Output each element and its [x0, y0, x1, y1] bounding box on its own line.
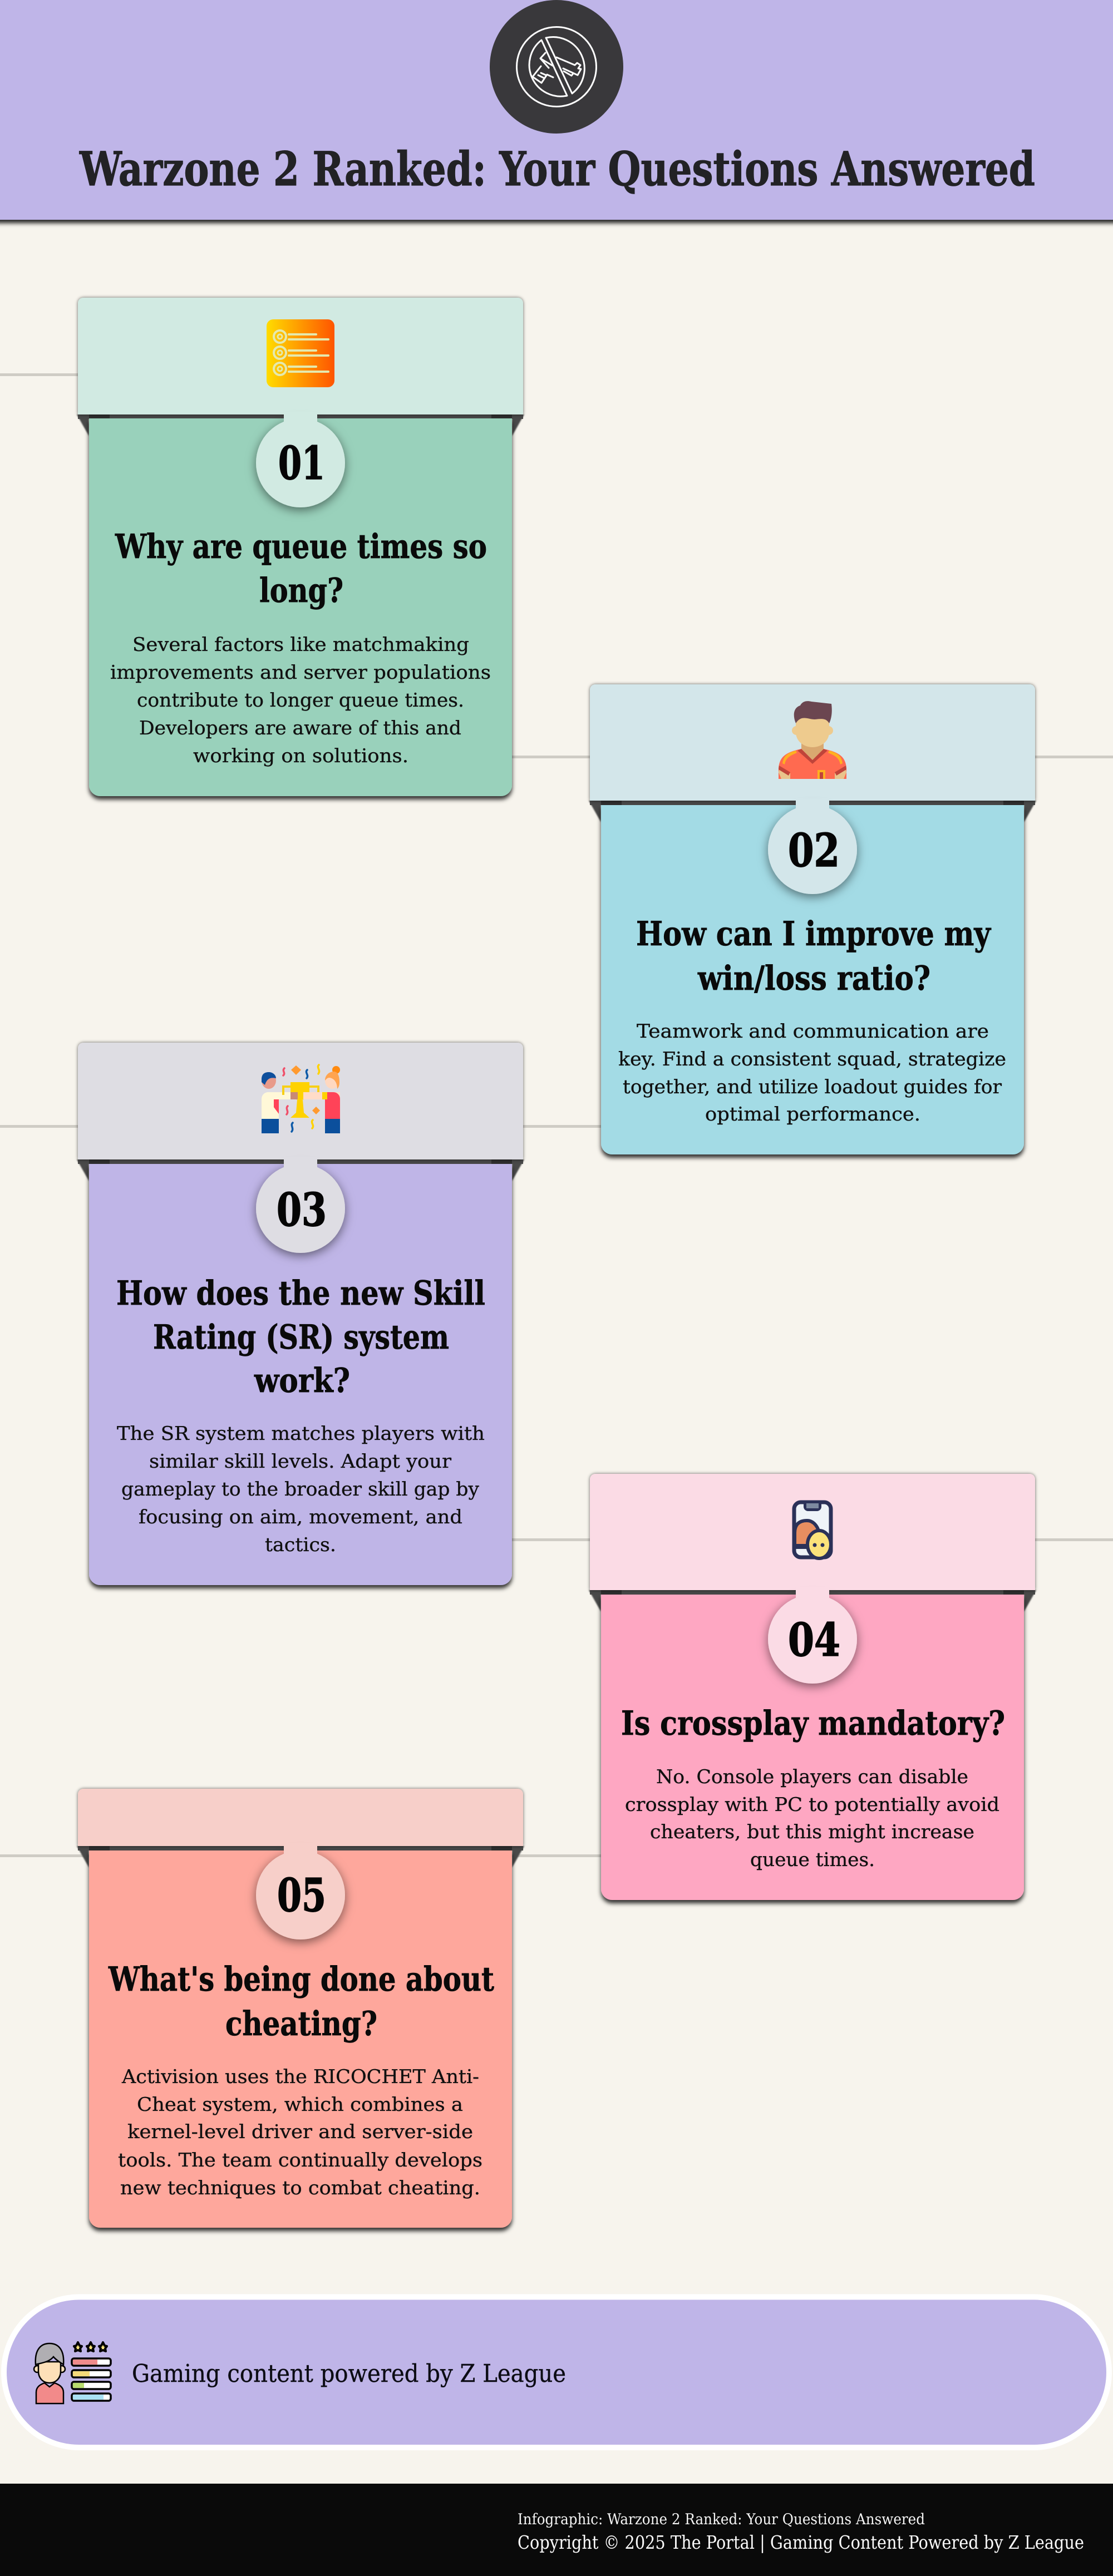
answer text: Activision uses the RICOCHET Anti-: [121, 2066, 479, 2088]
panel header: [590, 1474, 1035, 1590]
panel fold: [589, 801, 1036, 822]
panel header: [78, 298, 523, 414]
footer: [0, 2484, 1113, 2576]
answer text: tactics.: [265, 1534, 336, 1556]
number badge 04: [768, 1587, 857, 1684]
answer text: cheaters, but this might increase: [650, 1821, 974, 1843]
number badge 05: 05: [277, 1869, 326, 1922]
number badge 03: 03: [277, 1183, 327, 1237]
answer text: improvements and server populations: [110, 662, 491, 684]
number badge 02: 02: [788, 824, 840, 877]
number badge 01: [256, 412, 345, 507]
answer text: tools. The team continually develops: [118, 2149, 482, 2172]
answer text: key. Find a consistent squad, strategize: [618, 1048, 1006, 1070]
number badge 05: [256, 1843, 345, 1940]
heading: Rating (SR) system: [153, 1318, 449, 1357]
answer text: working on solutions.: [193, 745, 408, 767]
answer text: crossplay with PC to potentially avoid: [625, 1794, 999, 1816]
answer text: [110, 634, 491, 767]
answer text: No. Console players can disable: [656, 1766, 968, 1788]
footer background: [0, 2484, 1113, 2576]
icon: checklist: [267, 319, 334, 387]
panel header: [78, 1043, 523, 1159]
panel body: [601, 805, 1024, 1154]
heading: [115, 527, 487, 610]
panel: question 02: [589, 684, 1036, 1154]
header band: [0, 0, 1113, 220]
answer text: new techniques to combat cheating.: [120, 2177, 480, 2199]
icon: team with trophy: [262, 1065, 340, 1133]
heading: [108, 1960, 494, 2044]
heading: work?: [254, 1361, 350, 1400]
icon: phone with game characters: [794, 1501, 831, 1558]
callout text: Gaming content powered by Z League: [132, 2360, 566, 2388]
panel body: [89, 1164, 512, 1585]
number badge 01: 01: [278, 437, 325, 490]
panel: question 01: [77, 298, 524, 796]
answer text: Cheat system, which combines a: [137, 2094, 463, 2116]
answer text: [625, 1766, 999, 1871]
callout: powered by Z League: [4, 2297, 1109, 2447]
panel: question 03: [77, 1043, 524, 1585]
panel fold: [589, 1590, 1036, 1612]
answer text: contribute to longer queue times.: [137, 689, 464, 712]
heading: Is crossplay mandatory?: [621, 1704, 1005, 1743]
answer text: together, and utilize loadout guides for: [623, 1076, 1002, 1098]
panel header: [590, 684, 1035, 801]
answer text: queue times.: [750, 1849, 875, 1871]
callout pill: [4, 2297, 1109, 2447]
number badge 04: 04: [788, 1613, 840, 1667]
panel: question 05: [77, 1789, 524, 2228]
panel fold: [77, 1159, 524, 1181]
footer credit line: Infographic: Warzone 2 Ranked: Your Questions Answered: [518, 2511, 925, 2528]
answer text: Teamwork and communication are: [637, 1020, 989, 1043]
heading: [116, 1274, 485, 1400]
number badge 02: [768, 798, 857, 894]
panel fold: [77, 414, 524, 436]
panel body: [601, 1595, 1024, 1900]
panel body: [89, 418, 512, 796]
answer text: Several factors like matchmaking: [132, 634, 469, 656]
icon: player profile with stat bars: [34, 2342, 111, 2404]
panel fold: [77, 1846, 524, 1868]
connector lines: [0, 373, 1113, 1857]
answer text: The SR system matches players with: [117, 1423, 485, 1445]
answer text: similar skill levels. Adapt your: [149, 1450, 452, 1473]
panel: question 04: [589, 1474, 1036, 1900]
number badge 03: [256, 1157, 345, 1253]
icon: crossed-out gun badge: [490, 0, 623, 134]
heading: How can I improve my: [636, 915, 992, 954]
panel header: [78, 1789, 523, 1846]
icon: football player: [779, 701, 846, 779]
answer text: optimal performance.: [705, 1103, 920, 1126]
answer text: [618, 1020, 1006, 1126]
answer text: [117, 1423, 485, 1556]
heading: cheating?: [225, 2005, 377, 2044]
answer text: focusing on aim, movement, and: [139, 1506, 462, 1528]
answer text: [118, 2066, 482, 2199]
header background: [0, 0, 1113, 220]
heading: [636, 915, 992, 998]
answer text: gameplay to the broader skill gap by: [121, 1478, 480, 1501]
heading: What's being done about: [108, 1960, 494, 1999]
heading: Why are queue times so: [115, 527, 487, 566]
answer text: Developers are aware of this and: [139, 717, 461, 739]
heading: How does the new Skill: [116, 1274, 485, 1313]
heading: long?: [259, 571, 343, 610]
heading: win/loss ratio?: [697, 959, 930, 998]
panel body: [89, 1850, 512, 2228]
answer text: kernel-level driver and server-side: [127, 2121, 473, 2143]
